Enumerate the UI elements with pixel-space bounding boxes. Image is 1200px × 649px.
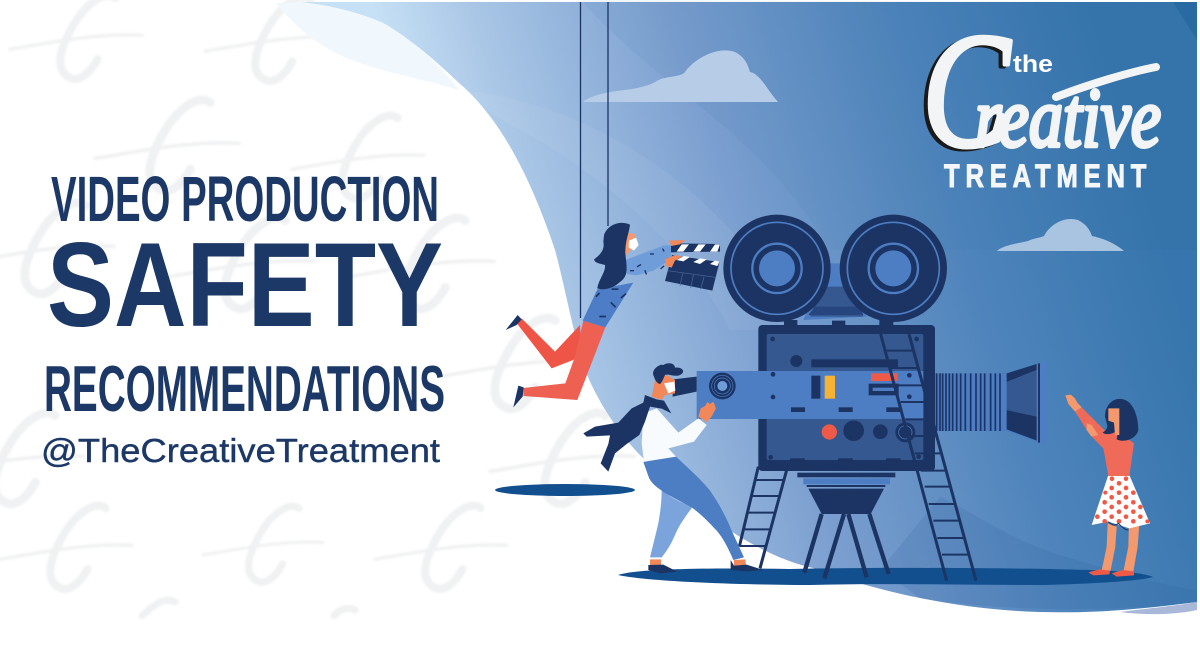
hands	[665, 240, 685, 268]
film camera	[697, 215, 1047, 581]
logo word: Creative: Creative	[922, 0, 1161, 182]
heading block	[41, 163, 445, 469]
hair	[1103, 399, 1138, 441]
shirt	[642, 408, 707, 462]
shoes	[648, 560, 763, 573]
clapperboard	[665, 243, 720, 291]
left reel	[723, 215, 831, 322]
social handle: @TheCreativeTreatment	[41, 432, 440, 469]
screws	[768, 337, 921, 460]
waving woman	[1065, 395, 1150, 577]
logo word: the: the	[1013, 51, 1053, 78]
right reel	[840, 215, 947, 322]
tripod	[797, 473, 895, 578]
arm sleeve	[625, 245, 671, 275]
cameraman head, scarf and hand	[583, 363, 716, 472]
front leg	[523, 321, 605, 400]
logo: the Creative Treatment	[918, 0, 1161, 195]
top and raised arm	[1075, 407, 1134, 476]
cameraman body	[642, 408, 763, 573]
face mask	[629, 238, 639, 251]
reel supports	[784, 320, 893, 336]
lens hood	[1007, 361, 1047, 444]
back leg	[650, 490, 693, 557]
ground shadow	[618, 568, 1153, 585]
cloud right	[997, 219, 1124, 251]
skirt fold	[1108, 522, 1128, 530]
shoes	[506, 315, 524, 407]
ankles	[650, 559, 746, 566]
torso	[583, 283, 633, 327]
mask	[664, 382, 675, 393]
shoes	[1088, 569, 1134, 577]
lower controls	[790, 420, 915, 463]
front ladder	[881, 334, 976, 581]
logo word: treatment: TREATMENT	[944, 159, 1147, 195]
hair	[653, 363, 683, 384]
heading line: safety: SAFETY	[47, 218, 443, 352]
face	[652, 375, 675, 400]
logo swash	[1056, 67, 1156, 97]
heading line: video production: VIDEO PRODUCTION	[51, 163, 439, 235]
back leg	[517, 318, 582, 368]
hand	[698, 402, 716, 422]
skirt dots	[1095, 476, 1149, 524]
back ladder left	[739, 467, 787, 568]
hands	[1065, 395, 1098, 437]
viewfinder eyepiece	[673, 377, 697, 397]
upper drum between reels	[803, 263, 867, 320]
ropes	[580, 2, 608, 318]
translucent layered waves	[459, 90, 800, 330]
skirt	[1092, 475, 1150, 528]
cloud top	[583, 50, 778, 102]
logo word: Creative shadow: C	[918, 2, 1008, 184]
front leg	[643, 457, 744, 560]
heading line: recommendations: RECOMMENDATIONS	[44, 352, 445, 425]
watermark pattern	[0, 0, 634, 616]
upper controls	[790, 355, 898, 367]
light wisp at the top of the wave	[276, 2, 459, 90]
face and neck	[1108, 408, 1119, 435]
horizontal beam	[697, 371, 923, 419]
hanging woman with clapperboard	[506, 223, 720, 407]
face and neck	[623, 233, 638, 255]
beam details	[709, 372, 912, 412]
hair	[594, 223, 630, 289]
jump shadow	[495, 484, 635, 496]
scarf	[583, 395, 671, 472]
lens barrel	[935, 373, 1007, 431]
legs	[1102, 522, 1139, 572]
camera body	[758, 325, 935, 471]
body panel	[767, 334, 923, 460]
background blue wave	[276, 0, 1197, 614]
